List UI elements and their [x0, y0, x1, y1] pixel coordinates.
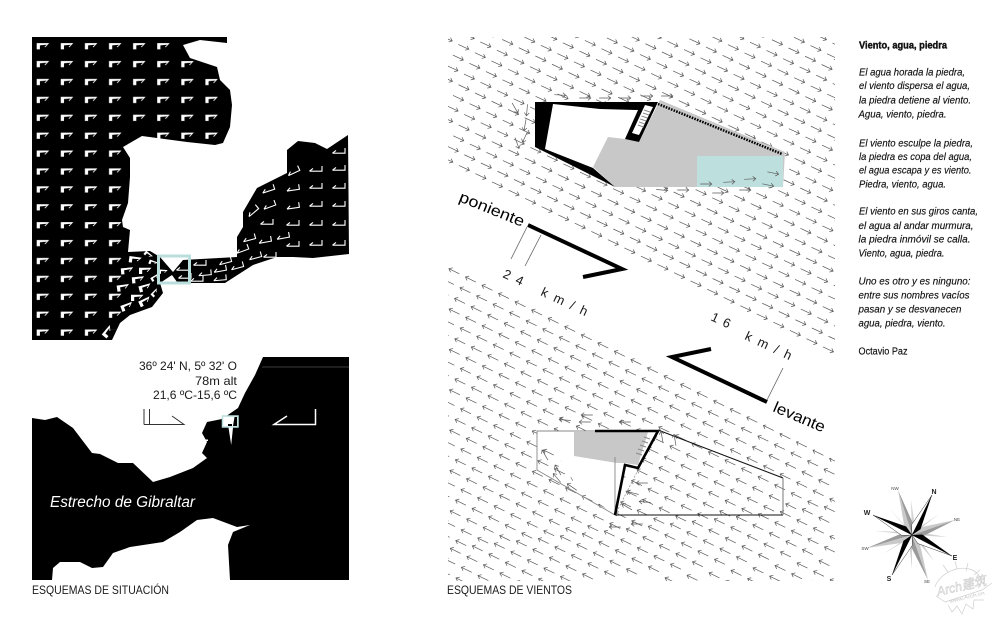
- stair: [632, 105, 653, 135]
- stanza 1: El agua horada la piedra,: [859, 68, 965, 78]
- black walls: [535, 102, 658, 187]
- arrows deflected around the building: [540, 413, 678, 529]
- stamp wordmark: Arch建筑: [934, 573, 989, 599]
- poniente label: poniente: [457, 189, 527, 231]
- secondary letters: [861, 486, 960, 584]
- map label: Estrecho de Gibraltar: [50, 494, 196, 511]
- grey outlines: [537, 431, 615, 515]
- location data: 78m alt: [195, 374, 238, 388]
- plan: building under levante wind: [537, 413, 783, 529]
- stanza 1: Agua, viento, piedra.: [858, 110, 946, 120]
- grey terrace: [593, 100, 785, 187]
- arrows deflected around the building: [510, 92, 779, 195]
- secondary points: [867, 490, 955, 580]
- stanza 4: [858, 276, 971, 330]
- poniente small wind symbol: [144, 409, 184, 424]
- stamp url: www.Arch.cn: [949, 590, 986, 605]
- compass letters: S: [887, 576, 892, 583]
- location data: 21,6 ºC-15,6 ºC: [153, 388, 237, 402]
- black thick walls: [595, 431, 658, 515]
- panel: Strait of Gibraltar map: [32, 357, 349, 580]
- stamp arc and rays: [935, 561, 992, 614]
- levante label: levante: [770, 399, 828, 436]
- icon: compass rose: [861, 486, 960, 584]
- secondary letters: NE: [954, 517, 960, 522]
- teal pool: [697, 156, 783, 187]
- heading: wind schemes: ESQUEMAS DE VIENTOS: [447, 585, 572, 597]
- wind symbol: levante: [672, 309, 828, 436]
- wind flags: Mediterranean: [176, 148, 345, 281]
- stair hatch: [636, 437, 650, 455]
- plot side: [782, 478, 784, 515]
- levante small wind symbol: [274, 409, 316, 424]
- highlight: strait locator: [158, 256, 190, 283]
- compass letters: N: [931, 489, 937, 496]
- stanza 4: pasan y se desvanecen: [858, 304, 962, 316]
- stanza 4: Uno es otro y es ninguno:: [858, 276, 971, 288]
- wind symbol: poniente: [457, 189, 622, 319]
- sea silhouette: [32, 37, 349, 340]
- compass letters: W: [864, 510, 871, 517]
- stanza 1: la piedra detiene al viento.: [859, 96, 971, 106]
- cardinal points: [873, 495, 952, 575]
- dashed diagonal: [615, 431, 658, 515]
- plot outline: [615, 430, 783, 515]
- grey terrace: [574, 432, 648, 465]
- poem author: Octavio Paz: [858, 346, 908, 358]
- stanza 4: agua, piedra, viento.: [858, 318, 946, 330]
- secondary letters: SW: [861, 546, 869, 551]
- stanza 2: [859, 138, 973, 190]
- compass letters: [864, 489, 958, 583]
- stanza 2: El viento esculpe la piedra,: [859, 138, 973, 150]
- watermark stamp: [934, 561, 992, 614]
- stanza 2: el agua escapa y es viento.: [859, 166, 972, 176]
- levante arrow: [672, 349, 767, 402]
- stanza 3: El viento en sus giros canta,: [859, 206, 978, 218]
- ground mask: [537, 431, 658, 515]
- poem title: Viento, agua, piedra: [859, 40, 947, 52]
- strait silhouette: [32, 357, 349, 580]
- stanza 2: la piedra es copa del agua,: [859, 152, 972, 163]
- stanza 3: la piedra inmóvil se calla.: [858, 234, 970, 246]
- fine line in the upper right: [262, 366, 349, 368]
- wind field: poniente: [448, 37, 835, 354]
- levante speed unit: k m / h: [743, 328, 794, 363]
- panel: situation map of Iberian coast with wind flags: [32, 37, 349, 340]
- levante speed value: 1 6: [709, 309, 733, 331]
- secondary letters: NW: [891, 486, 899, 491]
- stanza 1: el viento dispersa el agua,: [859, 81, 970, 92]
- dotted edge: [658, 104, 782, 154]
- location data: 36º 24' N, 5º 32' O: [139, 359, 237, 373]
- location data: [139, 359, 238, 402]
- poem: [858, 40, 978, 358]
- wind flags: Atlantic grid: [36, 43, 229, 339]
- wind flags: strait approach: [102, 251, 168, 339]
- stanza 3: [858, 206, 978, 260]
- stanza 3: el agua al andar murmura,: [858, 221, 974, 232]
- tertiary points: [875, 500, 947, 569]
- poniente speed unit: k m / h: [539, 284, 590, 319]
- poniente speed value: 2 4: [501, 266, 526, 289]
- heading: situation schemes: ESQUEMAS DE SITUACIÓN: [32, 584, 169, 597]
- dimension ticks: [511, 227, 541, 266]
- white notch on the coast: [203, 440, 208, 441]
- plan: building under poniente wind: [510, 92, 785, 195]
- dimension tick: [767, 368, 783, 400]
- stanza 1: [858, 68, 971, 120]
- poniente arrow: [528, 225, 622, 277]
- stanza 3: Viento, agua, piedra.: [858, 248, 944, 260]
- compass letters: E: [953, 555, 958, 562]
- locator box: [222, 416, 238, 445]
- stanza 4: entre sus nombres vacíos: [858, 290, 970, 302]
- secondary letters: SE: [924, 579, 930, 584]
- ground mask: [535, 102, 785, 187]
- wind field: levante: [448, 268, 835, 581]
- stanza 2: Piedra, viento, agua.: [859, 180, 946, 190]
